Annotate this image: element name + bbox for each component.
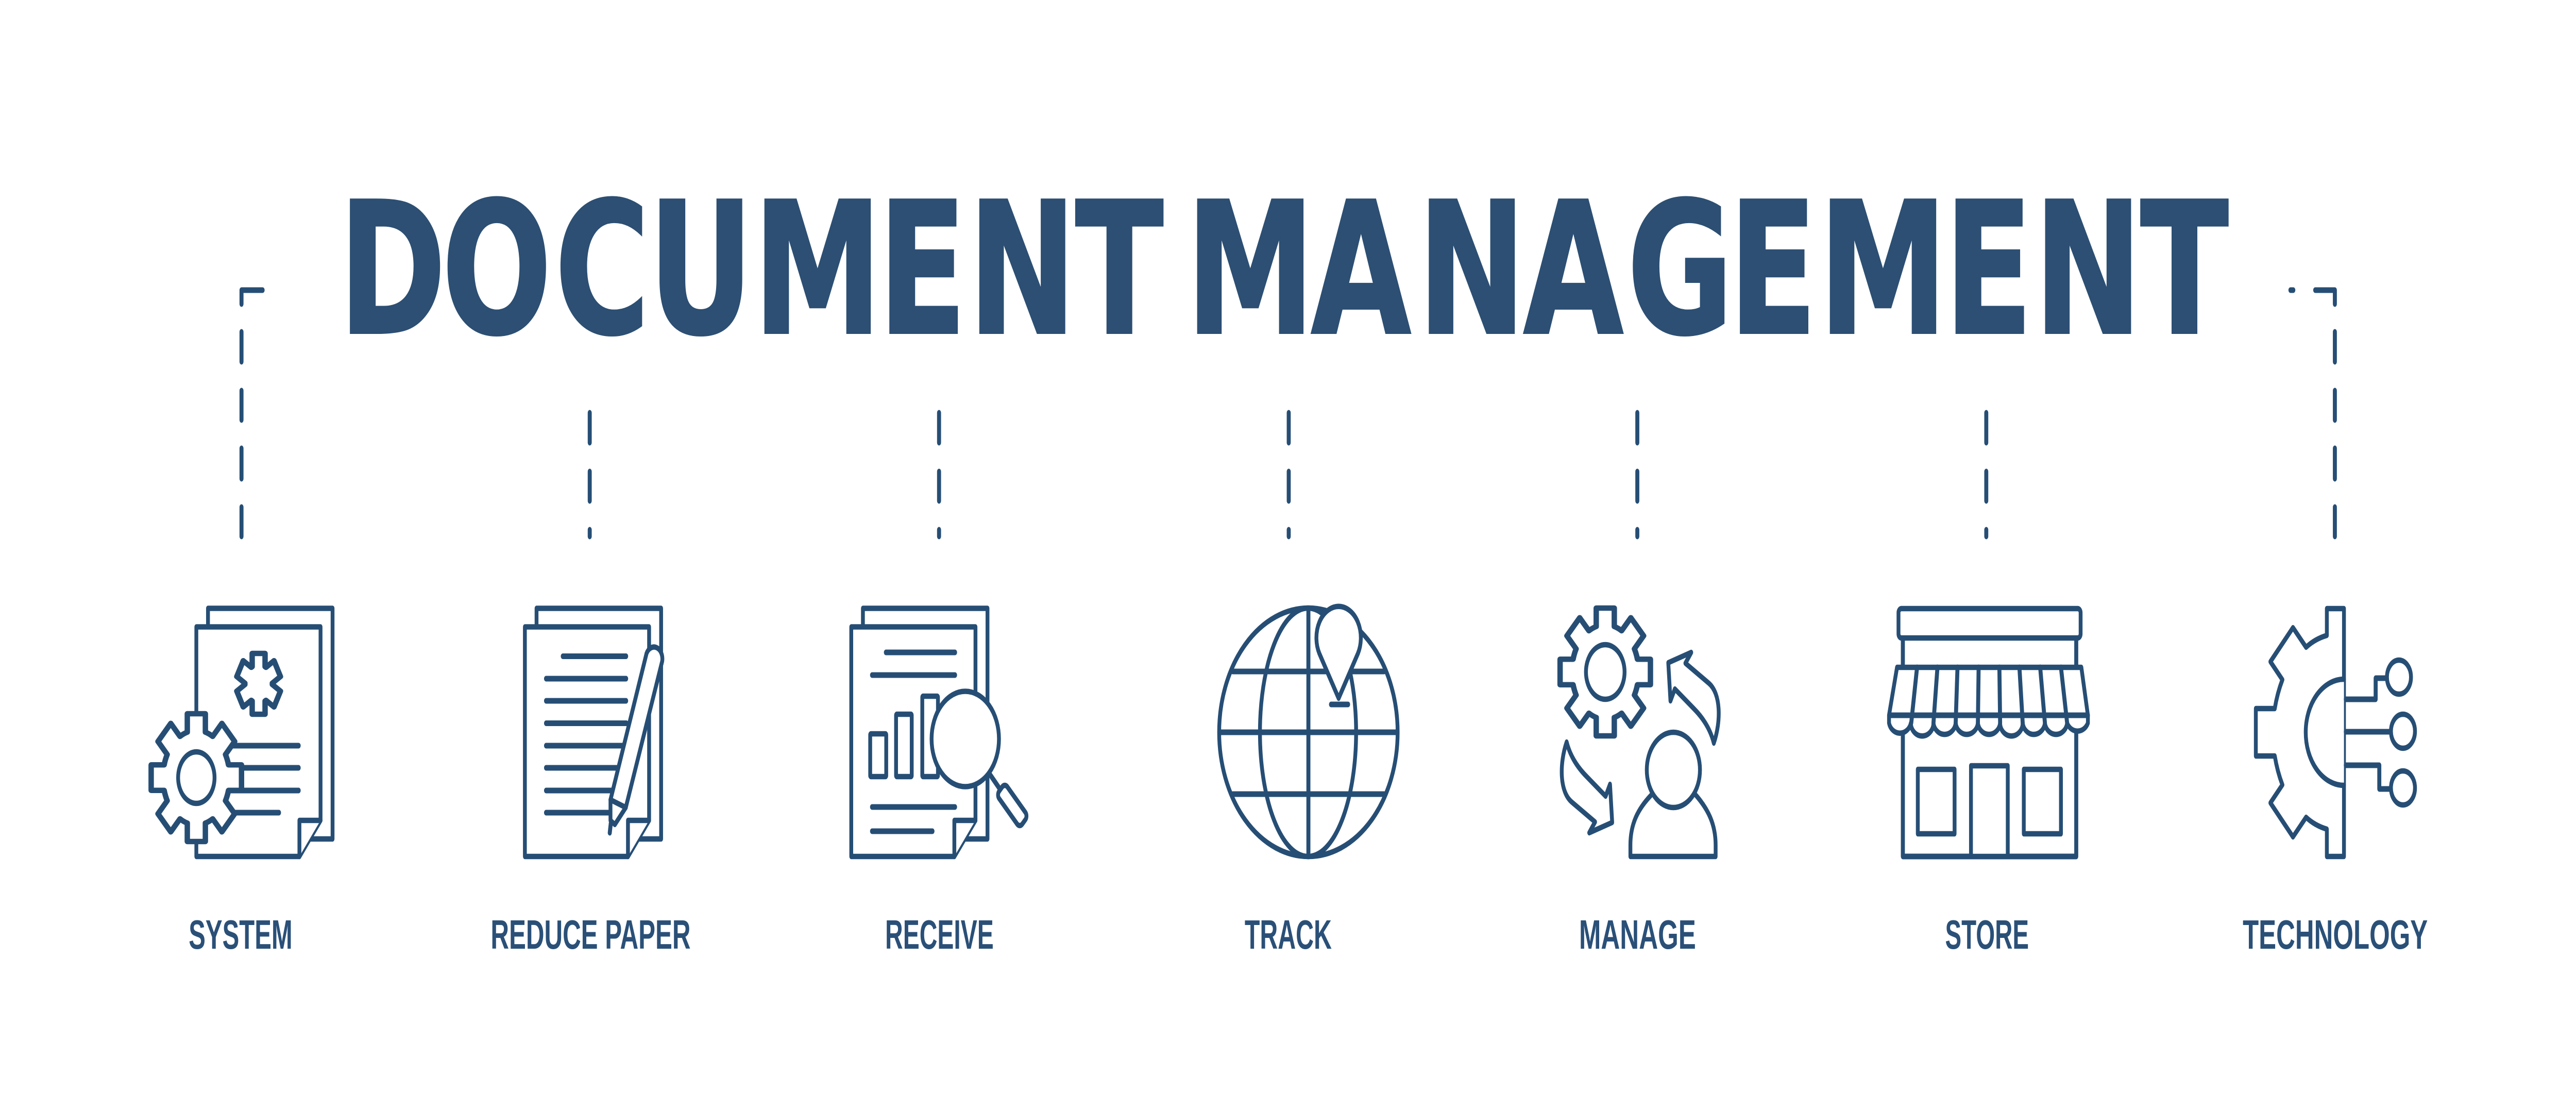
title: DOCUMENT MANAGEMENT — [339, 163, 2229, 376]
label: manage: MANAGE — [1579, 911, 1696, 957]
connector: manage — [1635, 413, 1640, 536]
connector: track — [1286, 413, 1292, 536]
icon: store — [1889, 609, 2088, 856]
icon: technology — [2256, 609, 2415, 856]
icon: reduce paper — [525, 608, 663, 856]
connector: technology — [2291, 290, 2335, 536]
icon: manage — [1560, 608, 1719, 856]
connector: store — [1984, 413, 1989, 536]
connector: receive — [936, 413, 942, 536]
icon: receive — [851, 608, 1028, 856]
icon: system — [151, 608, 333, 856]
label: store: STORE — [1945, 911, 2029, 957]
connector: system — [242, 290, 263, 536]
label: system: SYSTEM — [189, 911, 293, 957]
icon: track — [1219, 607, 1398, 856]
connector: reduce paper — [587, 413, 592, 536]
label: technology: TECHNOLOGY — [2243, 911, 2428, 957]
label: receive: RECEIVE — [885, 911, 994, 957]
label: track: TRACK — [1245, 911, 1332, 957]
label: reduce paper: REDUCE PAPER — [490, 911, 690, 957]
